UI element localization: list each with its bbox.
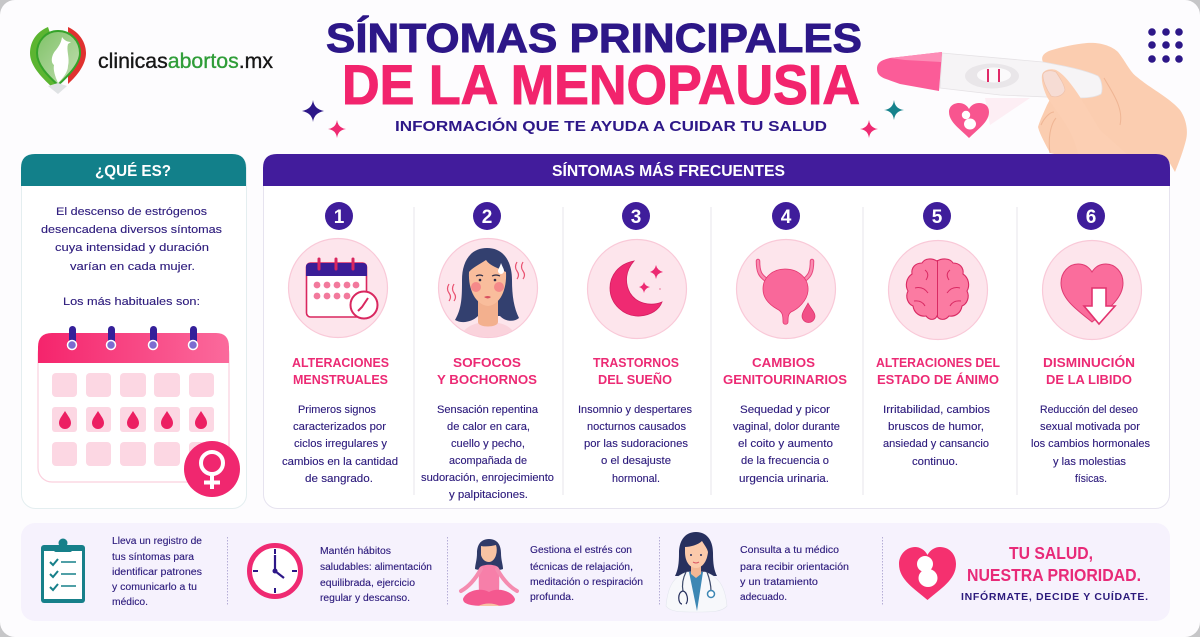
heading: DISMINUCIÓN <box>1043 355 1135 370</box>
description: por las sudoraciones <box>584 438 688 450</box>
heading: ALTERACIONES <box>292 356 389 370</box>
description: acompañada de <box>449 455 527 467</box>
slogan: INFÓRMATE, DECIDE Y CUÍDATE. <box>961 590 1148 603</box>
heading: ALTERACIONES DEL <box>876 356 1000 370</box>
symptom 3: trastornos del sueño <box>578 202 692 485</box>
number 3: 3 <box>631 207 641 228</box>
tip 3: estrés <box>461 539 643 606</box>
heading: Y BOCHORNOS <box>437 373 537 387</box>
text <box>740 545 849 603</box>
description: los cambios hormonales <box>1031 438 1150 450</box>
number 5 <box>923 202 951 230</box>
text: Consulta a tu médico <box>740 545 839 556</box>
decorative dots <box>1148 28 1183 63</box>
description <box>733 404 840 485</box>
number 4 <box>772 202 800 230</box>
heading: MENSTRUALES <box>293 373 388 387</box>
panel heading: síntomas: SÍNTOMAS MÁS FRECUENTES <box>552 163 785 180</box>
text: equilibrada, ejercicio <box>320 578 415 589</box>
panel: qué es <box>21 154 246 508</box>
panel heading: síntomas <box>263 154 1170 186</box>
decorative sparkles <box>302 100 904 138</box>
text: profunda. <box>530 592 574 603</box>
text <box>530 545 643 603</box>
number 3 <box>622 202 650 230</box>
text: definition <box>41 206 222 308</box>
symptom 2: sofocos y bochornos <box>421 202 554 501</box>
description: nocturnos causados <box>587 421 686 433</box>
text: técnicas de relajación, <box>530 562 633 573</box>
description: y palpitaciones. <box>449 489 528 501</box>
description: cambios en la cantidad <box>282 456 398 468</box>
tip 4: médico <box>666 532 849 612</box>
text: para recibir orientación <box>740 562 849 573</box>
text: Lleva un registro de <box>112 536 202 547</box>
number 1 <box>325 202 353 230</box>
description <box>578 404 692 485</box>
symptom 4: cambios genitourinarios <box>723 202 847 485</box>
description: hormonal. <box>612 473 660 485</box>
logo wordmark: clinicasabortos.mx <box>98 50 274 73</box>
title <box>326 15 862 116</box>
description: de sangrado. <box>305 473 373 485</box>
description <box>282 404 398 485</box>
text <box>320 546 432 604</box>
number 4: 4 <box>781 207 792 228</box>
description <box>1031 404 1150 485</box>
description: Reducción del deseo <box>1040 404 1138 416</box>
text <box>112 536 202 608</box>
icon: heart with baby <box>899 547 956 600</box>
number 6 <box>1077 202 1105 230</box>
icon: woman with hot flush <box>438 238 538 338</box>
text: adecuado. <box>740 592 787 603</box>
text: definition: cuya intensidad y duración <box>55 242 209 254</box>
description: urgencia urinaria. <box>739 473 829 485</box>
icon: brain <box>888 240 988 340</box>
heading: SOFOCOS <box>453 356 521 370</box>
description: ansiedad y cansancio <box>883 438 989 450</box>
slogan <box>961 543 1148 603</box>
description: bruscos de humor, <box>888 421 984 433</box>
symptom 5: alteraciones del estado de ánimo <box>876 202 1000 468</box>
heading: CAMBIOS <box>752 356 815 370</box>
text: definition: El descenso de estrógenos <box>56 206 207 218</box>
icon: clock <box>250 546 300 596</box>
description: Sequedad y picor <box>740 404 830 416</box>
text: saludables: alimentación <box>320 562 432 573</box>
symptom 6: disminución de la libido <box>1031 202 1150 485</box>
panel: consejos <box>21 523 1170 621</box>
description <box>883 404 990 468</box>
icon: doctor <box>666 532 727 612</box>
icon: moon and stars <box>588 240 686 338</box>
description: cuello y pecho, <box>451 438 525 450</box>
icon: logo pin <box>30 27 86 94</box>
description: sudoración, enrojecimiento <box>421 472 554 484</box>
text: Mantén hábitos <box>320 546 391 557</box>
description: Irritabilidad, cambios <box>883 404 990 416</box>
icon: heart with down arrow <box>1042 240 1142 340</box>
panel heading: qué es <box>21 154 246 186</box>
text: identificar patrones <box>112 567 202 578</box>
closing message <box>899 543 1148 603</box>
logo: clinicasabortos.mx <box>30 27 274 94</box>
text: definition: Los más habituales son: <box>63 296 200 308</box>
number 5: 5 <box>932 207 943 228</box>
description <box>421 404 554 501</box>
text: Gestiona el estrés con <box>530 545 632 556</box>
description: caracterizados por <box>293 421 386 433</box>
description: y las molestias <box>1053 456 1126 468</box>
text: y comunicarlo a tu <box>112 582 197 593</box>
slogan: NUESTRA PRIORIDAD. <box>967 565 1141 585</box>
description: de calor en cara, <box>447 421 530 433</box>
icon: calendar with clock <box>288 238 388 338</box>
description: ciclos irregulares y <box>294 438 388 450</box>
heading: DE LA LIBIDO <box>1046 373 1132 387</box>
icon: woman meditating <box>461 539 517 606</box>
text: y un tratamiento <box>740 577 818 588</box>
description: continuo. <box>912 456 958 468</box>
description: físicas. <box>1075 473 1107 485</box>
description: Primeros signos <box>298 404 376 416</box>
number 2: 2 <box>482 207 492 228</box>
slogan: TU SALUD, <box>1009 543 1093 563</box>
title: DE LA MENOPAUSIA <box>342 53 860 116</box>
text: tus síntomas para <box>112 552 194 563</box>
description: el coito y aumento <box>738 438 833 450</box>
icon: clipboard <box>41 538 85 603</box>
heading: ESTADO DE ÁNIMO <box>877 372 999 387</box>
heading: DEL SUEÑO <box>598 372 672 387</box>
text: regular y descanso. <box>320 593 410 604</box>
text: definition: varían en cada mujer. <box>70 261 195 273</box>
symptom 1: alteraciones menstruales <box>282 202 398 485</box>
heading: TRASTORNOS <box>593 356 679 370</box>
text: definition: desencadena diversos síntomas <box>41 224 222 236</box>
icon: heart with baby <box>949 103 989 138</box>
hand holding pregnancy test <box>877 43 1187 172</box>
text: médico. <box>112 597 148 608</box>
description: sexual motivada por <box>1040 421 1140 433</box>
panel: síntomas más frecuentes <box>263 154 1170 508</box>
icon: light beam from test to heart <box>985 98 1030 125</box>
description: vaginal, dolor durante <box>733 421 840 433</box>
description: Sensación repentina <box>437 404 538 416</box>
subtitle: INFORMACIÓN QUE TE AYUDA A CUIDAR TU SALUD <box>395 117 827 135</box>
description: o el desajuste <box>601 455 671 467</box>
icon: period calendar <box>38 326 240 497</box>
panel heading: qué es: ¿QUÉ ES? <box>95 163 171 180</box>
title: SÍNTOMAS PRINCIPALES <box>326 15 862 61</box>
text: meditación o respiración <box>530 577 643 588</box>
description: Insomnio y despertares <box>578 404 692 416</box>
number 2 <box>473 202 501 230</box>
icon: bladder <box>736 240 836 338</box>
number 1: 1 <box>334 207 345 228</box>
tip 2: hábitos <box>250 546 432 604</box>
heading: GENITOURINARIOS <box>723 373 847 387</box>
number 6: 6 <box>1086 207 1096 228</box>
description: de la frecuencia o <box>741 455 829 467</box>
tip 1: registro <box>41 536 202 608</box>
